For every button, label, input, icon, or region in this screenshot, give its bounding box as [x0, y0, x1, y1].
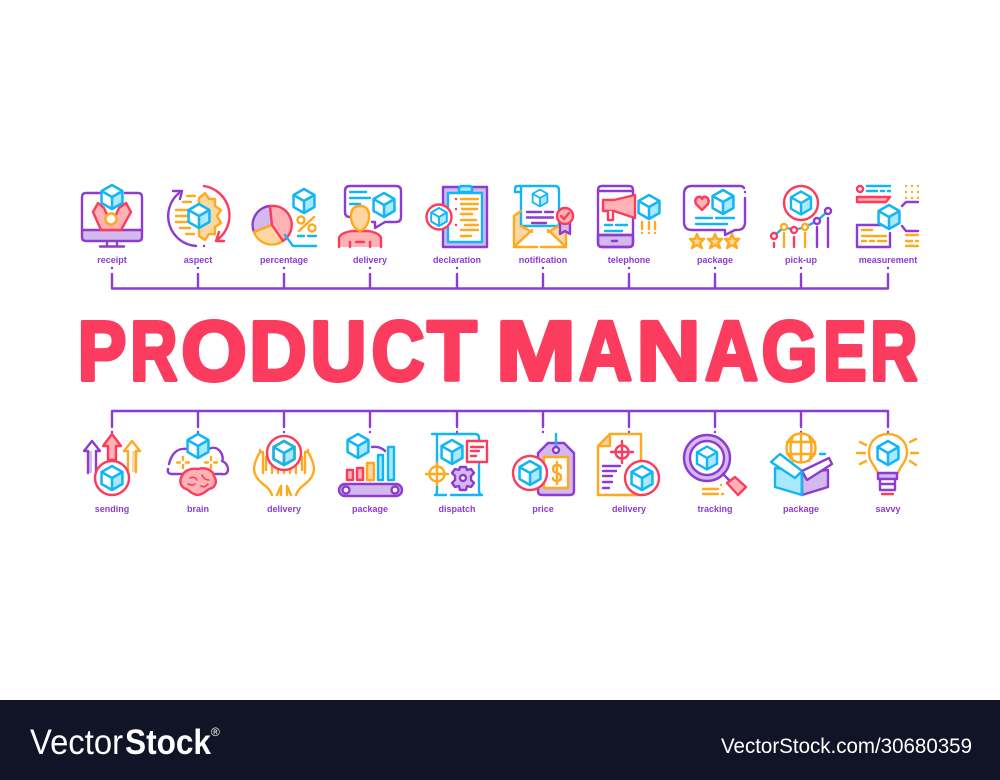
title: A: [705, 304, 758, 398]
label: measurement: measurement: [859, 255, 917, 265]
icon: dispatch: [426, 434, 487, 495]
icon: aspect: [168, 186, 229, 246]
image id: VectorStock.com/30680359: [721, 735, 972, 758]
icon: delivery bubble: [339, 186, 401, 247]
icon: delivery hands: [254, 436, 314, 495]
icon: package review: [684, 186, 745, 248]
label: declaration: declaration: [433, 255, 481, 265]
label: savvy: savvy: [875, 504, 901, 514]
icon: measurement: [857, 186, 918, 247]
title: O: [181, 304, 247, 398]
icon: notification: [514, 186, 573, 247]
top connector: [112, 268, 888, 288]
icon: package conveyor: [339, 434, 402, 496]
label: aspect: aspect: [184, 255, 212, 265]
icon: tracking: [684, 435, 746, 495]
logo: Vector: [30, 723, 123, 762]
title: C: [372, 304, 425, 398]
icon: sending: [84, 434, 140, 495]
label: price: price: [532, 504, 554, 514]
title: P: [78, 304, 126, 398]
label: brain: brain: [187, 504, 209, 514]
icon: declaration: [426, 186, 487, 247]
title: R: [870, 304, 917, 398]
logo: ®: [211, 725, 220, 739]
label: notification: notification: [519, 255, 567, 265]
title: T: [427, 304, 477, 398]
label: delivery hands: delivery: [267, 504, 301, 514]
label: sending: sending: [95, 504, 129, 514]
title: D: [249, 304, 307, 398]
label: package review: package: [697, 255, 733, 265]
icon: receipt: [82, 185, 142, 246]
label: dispatch: dispatch: [438, 504, 476, 514]
label: delivery: delivery: [353, 255, 387, 265]
label: delivery document: delivery: [612, 504, 646, 514]
icon: savvy lightbulb: [857, 434, 918, 494]
icon: telephone: [598, 186, 659, 247]
title: U: [310, 304, 366, 398]
title: A: [579, 304, 632, 398]
icon: percentage: [253, 189, 316, 246]
label: tracking: tracking: [697, 504, 733, 514]
logo: Stock: [125, 723, 211, 762]
icon: delivery document: [598, 434, 659, 495]
icon: package globe: [771, 434, 832, 495]
icon: pick-up chart: [771, 186, 831, 247]
bottom connector: [112, 411, 888, 432]
title: E: [823, 304, 867, 398]
logo: [30, 723, 220, 762]
footer band: [0, 700, 1000, 780]
label: pick-up: pick-up: [785, 255, 817, 265]
label: percentage: percentage: [260, 255, 308, 265]
title: M: [496, 304, 576, 398]
icon: brain: [168, 434, 228, 495]
label: telephone: telephone: [608, 255, 650, 265]
title: G: [762, 304, 818, 398]
label: package conveyor: package: [352, 504, 388, 514]
title: N: [637, 304, 700, 398]
title: R: [130, 304, 177, 398]
label: receipt: receipt: [97, 255, 127, 265]
label: package globe: package: [783, 504, 819, 514]
icon: price: [513, 434, 574, 495]
